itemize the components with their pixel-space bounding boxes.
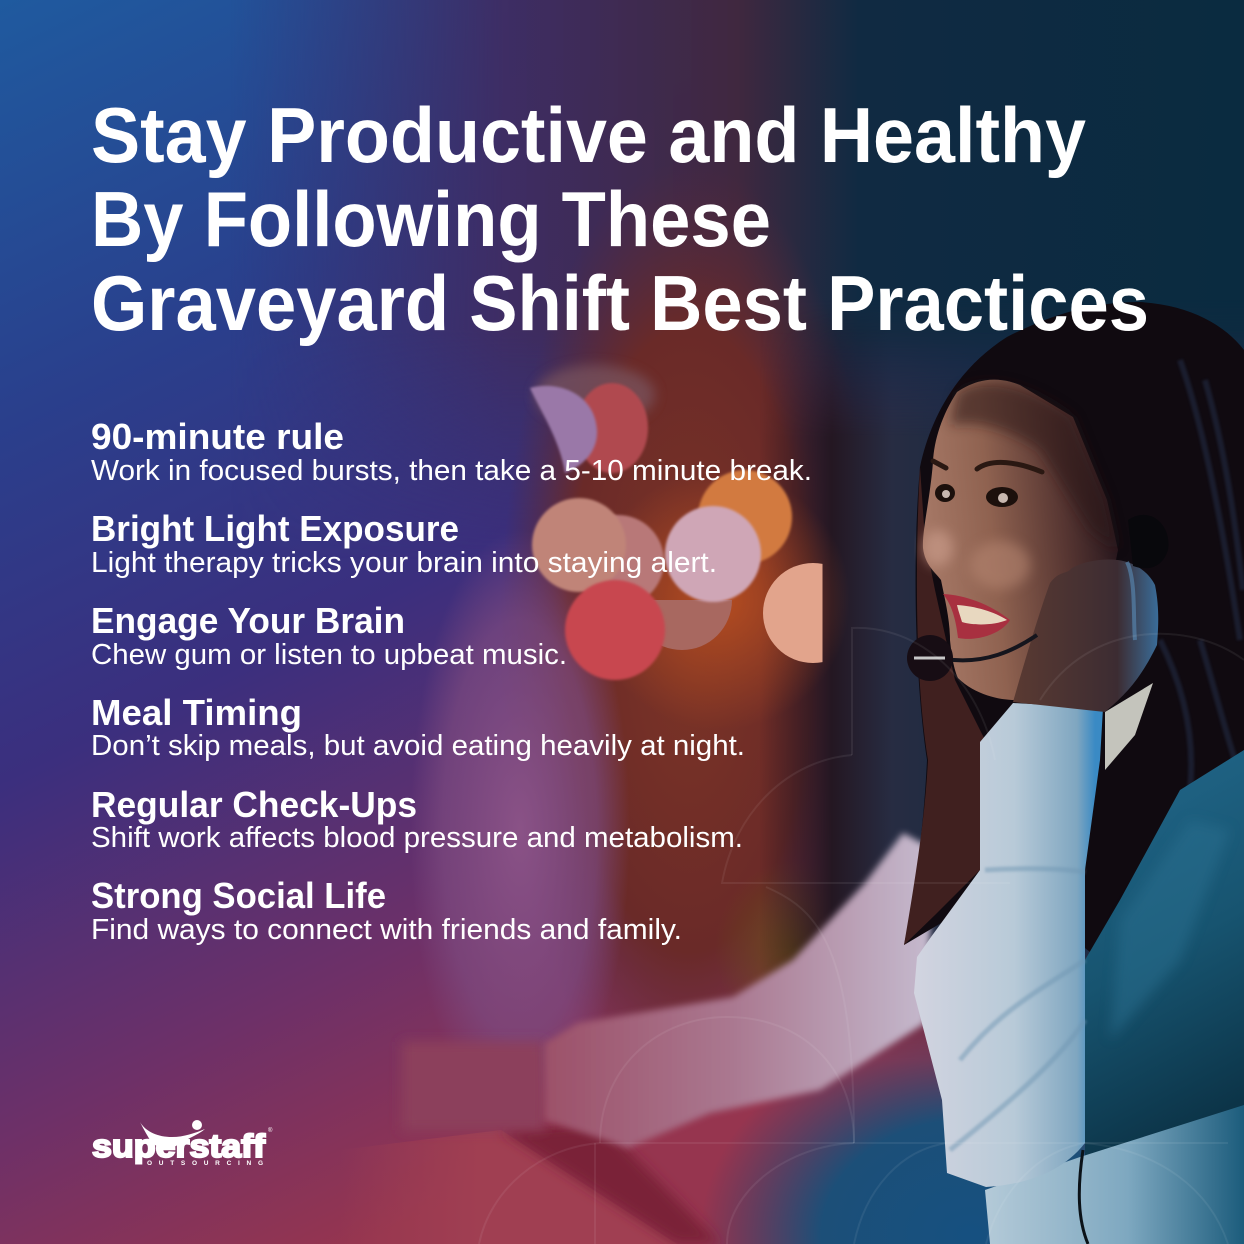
blouse folds <box>950 869 1085 1150</box>
keyboard and desk <box>340 1042 720 1244</box>
decorative outline shapes <box>479 628 1244 1244</box>
logo: superstaff outsourcing: OUTSOURCING <box>147 1160 263 1167</box>
tip: meal timing <box>91 692 745 762</box>
title: Stay Productive and Healthy <box>91 91 1086 179</box>
face <box>923 380 1118 700</box>
forehead shadow <box>950 382 1118 550</box>
blouse sleeve <box>914 703 1103 1187</box>
title: Graveyard Shift Best Practices <box>91 259 1149 347</box>
tip: bright light exposure <box>91 508 717 579</box>
jacket <box>1085 750 1244 1160</box>
hand <box>1013 560 1158 712</box>
woman with headset <box>545 302 1244 1244</box>
tip: 90-minute rule <box>91 416 812 487</box>
tip: regular check-ups: Regular Check-Ups <box>91 784 417 825</box>
tip: strong social life: Strong Social Life <box>91 875 386 916</box>
tip: bright light exposure: Bright Light Exposure <box>91 508 459 549</box>
tip: regular check-ups <box>91 784 743 854</box>
forearm sleeve <box>545 833 935 1148</box>
hair back <box>904 302 1244 960</box>
tip: 90-minute rule: 90-minute rule <box>91 416 344 457</box>
logo: superstaff outsourcing: ® <box>268 1127 273 1134</box>
eyebrows <box>933 461 1042 472</box>
tip: regular check-ups: Shift work affects blood pressure and metabolism. <box>91 822 743 854</box>
headset earpiece <box>1128 515 1168 568</box>
shirt front <box>985 1105 1244 1244</box>
knuckle highlight <box>1127 562 1135 640</box>
tip: engage your brain <box>91 600 567 671</box>
tip: meal timing: Don’t skip meals, but avoid eating heavily at night. <box>91 730 745 762</box>
tip: 90-minute rule: Work in focused bursts, then take a 5-10 minute break. <box>91 455 812 487</box>
logo: superstaff outsourcing <box>92 1120 273 1167</box>
mouth <box>943 594 1010 639</box>
headset cable <box>1079 1150 1088 1244</box>
tip: engage your brain: Chew gum or listen to upbeat music. <box>91 639 567 671</box>
title <box>91 91 1149 347</box>
title: By Following These <box>91 175 771 263</box>
headset microphone <box>907 635 1037 681</box>
nose highlight <box>923 530 953 566</box>
tip: bright light exposure: Light therapy tricks your brain into staying alert. <box>91 547 717 579</box>
tip: strong social life: Find ways to connect with friends and family. <box>91 914 682 946</box>
blurred bokeh lights <box>528 362 822 682</box>
eyes <box>935 484 1018 507</box>
tip: engage your brain: Engage Your Brain <box>91 600 405 641</box>
tip: meal timing: Meal Timing <box>91 692 302 733</box>
lace collar <box>1105 683 1153 770</box>
tip: strong social life <box>91 875 682 946</box>
hair highlights <box>1160 360 1243 790</box>
logo: superstaff outsourcing: superstaff <box>92 1128 265 1164</box>
brown hair strands <box>904 467 985 945</box>
